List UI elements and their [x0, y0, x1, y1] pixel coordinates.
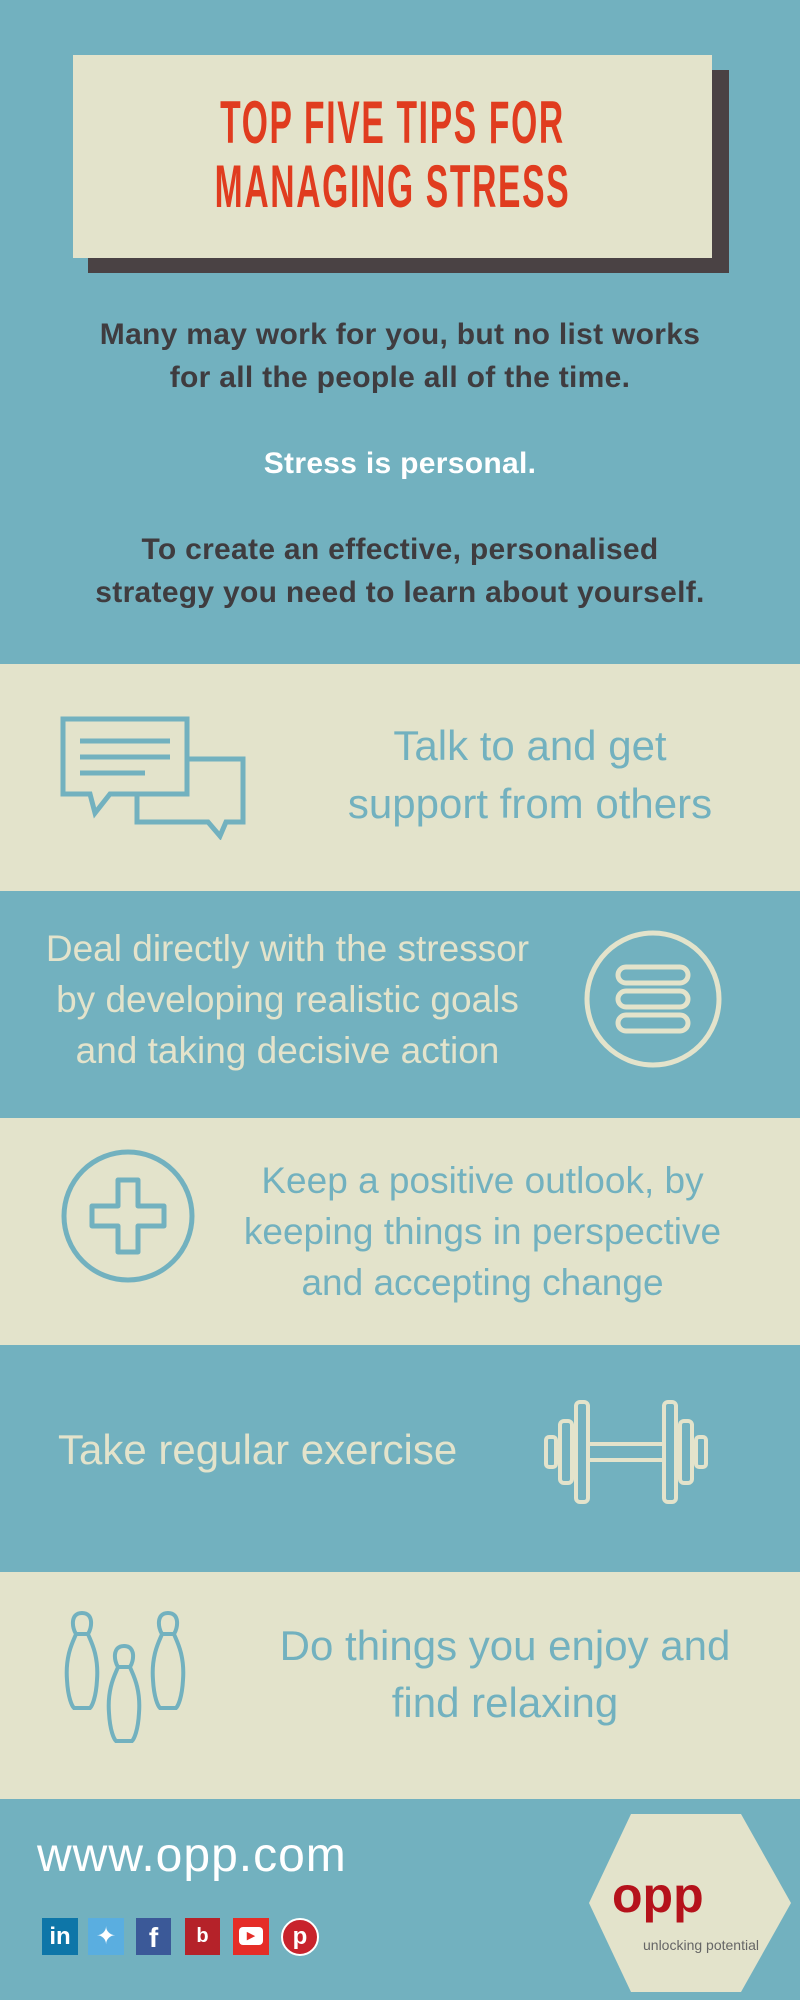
- logo hexagon: opp: [612, 1867, 704, 1923]
- text: Talk to and get: [393, 722, 667, 769]
- logo hexagon: unlocking potential: [643, 1937, 759, 1953]
- text: [46, 928, 529, 1071]
- text: Deal directly with the stressor: [46, 928, 529, 969]
- text: support from others: [348, 780, 712, 827]
- title: [215, 89, 570, 220]
- footer: [37, 1814, 791, 1992]
- text: find relaxing: [392, 1679, 618, 1726]
- intro text: To create an effective, personalised: [141, 533, 659, 566]
- panel: exercise: [58, 1400, 708, 1504]
- panel: positive outlook: [0, 1118, 800, 1345]
- social icons: [42, 1918, 319, 1956]
- intro text: Stress is personal.: [264, 447, 536, 480]
- website url: www.opp.com: [37, 1829, 347, 1882]
- icon: speech bubbles: [60, 716, 246, 840]
- text: by developing realistic goals: [56, 979, 519, 1020]
- intro text: [95, 318, 705, 609]
- text: and taking decisive action: [76, 1030, 499, 1071]
- text: [244, 1160, 721, 1303]
- text: keeping things in perspective: [244, 1211, 721, 1252]
- logo hexagon: [589, 1814, 791, 1992]
- icon: plus circle: [62, 1150, 194, 1282]
- text: Take regular exercise: [58, 1426, 457, 1473]
- text: [348, 722, 712, 827]
- intro text: Many may work for you, but no list works: [100, 318, 700, 351]
- text: and accepting change: [301, 1262, 664, 1303]
- panel: talk to others: [0, 664, 800, 891]
- icon: dumbbell: [544, 1400, 708, 1504]
- social icons: b: [196, 1925, 209, 1947]
- title: TOP FIVE TIPS FOR: [220, 89, 565, 156]
- panel: deal with stressor: [46, 928, 722, 1071]
- panel: enjoy: [0, 1572, 800, 1799]
- social icons: in: [49, 1923, 71, 1950]
- intro text: for all the people all of the time.: [170, 361, 630, 394]
- social icons: ▶: [247, 1930, 255, 1942]
- title shadow: [88, 70, 729, 273]
- social icons: p: [293, 1923, 307, 1950]
- icon: bowling pins: [64, 1611, 186, 1743]
- title: MANAGING STRESS: [215, 153, 570, 220]
- social icons: ✦: [96, 1923, 116, 1950]
- text: Keep a positive outlook, by: [261, 1160, 704, 1201]
- title box: [73, 55, 712, 258]
- intro text: strategy you need to learn about yourself.: [95, 576, 705, 609]
- text: Do things you enjoy and: [280, 1622, 730, 1669]
- text: [280, 1622, 730, 1726]
- icon: list circle: [584, 930, 722, 1068]
- social icons: f: [149, 1922, 158, 1953]
